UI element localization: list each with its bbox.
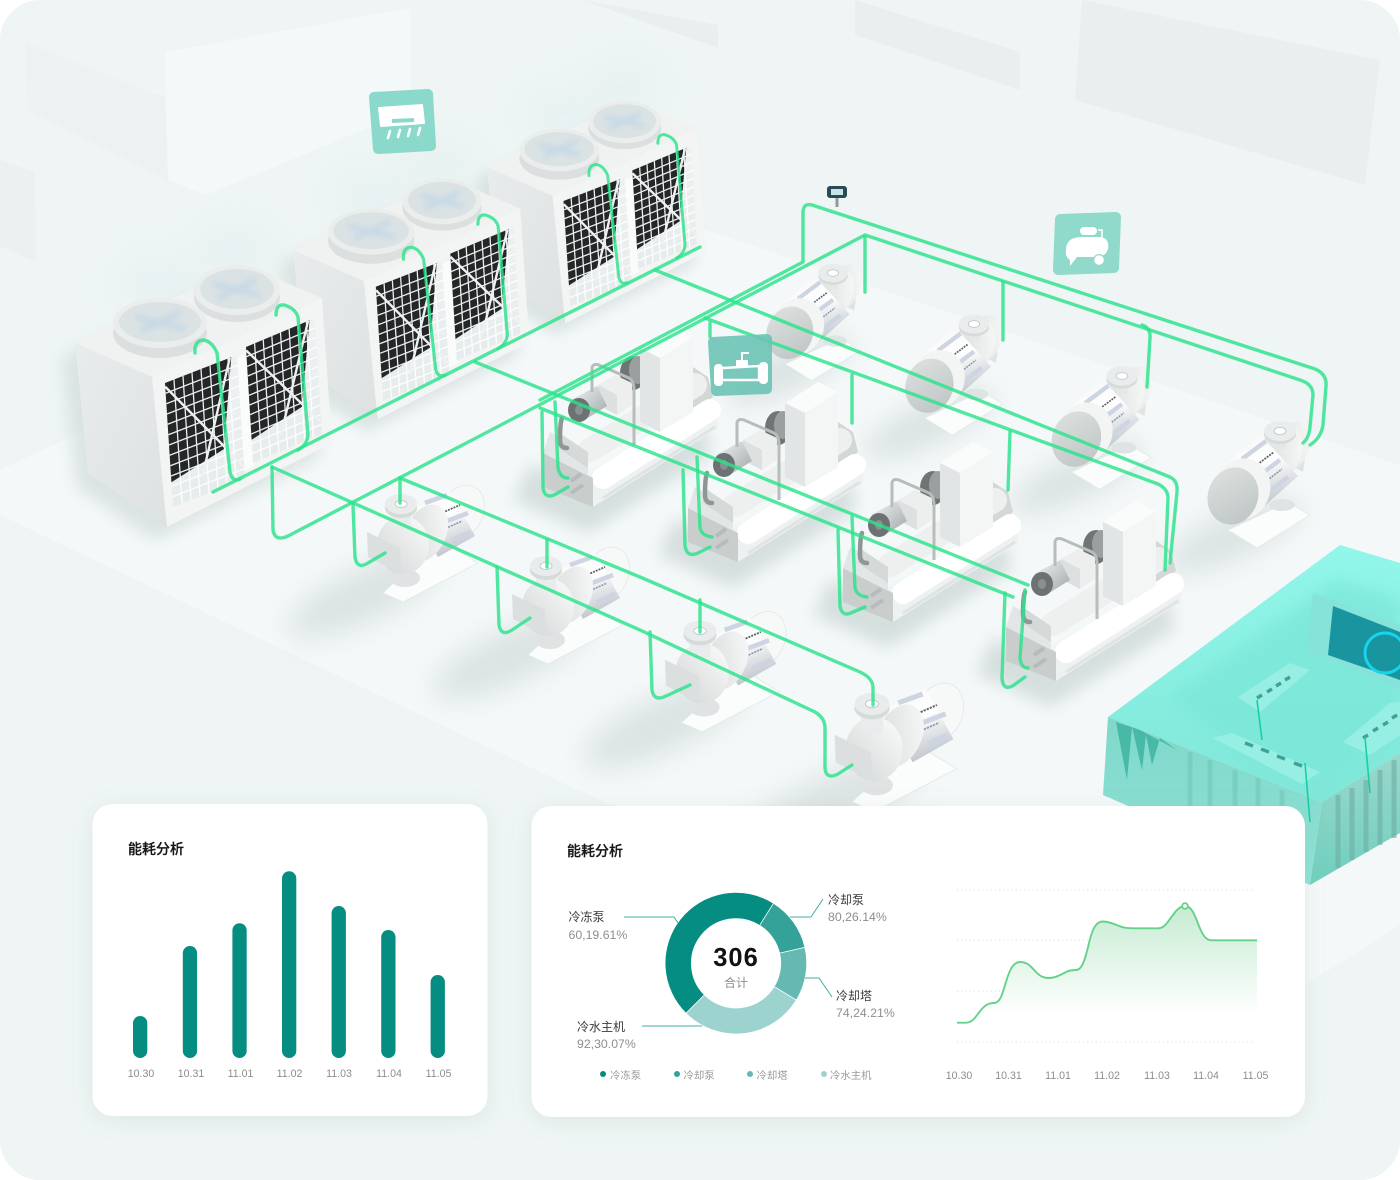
line chart axis labels: 11.04 xyxy=(1193,1070,1219,1082)
conference table 1 xyxy=(1238,663,1310,740)
lower pump row: pump 2 xyxy=(432,546,630,705)
panel: bar chart card xyxy=(92,804,488,1116)
donut leader lines xyxy=(624,899,832,1026)
donut total xyxy=(714,948,757,988)
refrigeration machine 1 xyxy=(513,327,718,533)
label: 冷却泵 xyxy=(828,893,887,924)
ghost buildings backdrop xyxy=(0,0,1380,262)
donut total: 合计 xyxy=(724,975,748,990)
line chart axis labels: 11.05 xyxy=(1243,1070,1268,1082)
label: 冷却塔 xyxy=(836,989,895,1020)
donut legend xyxy=(600,1069,872,1082)
refrigeration machine 3 xyxy=(813,442,1018,648)
wall screen xyxy=(1307,593,1400,690)
cooling tower 2 xyxy=(282,178,529,432)
upper pump row: pump 5 xyxy=(728,264,861,408)
line chart axis labels: 11.01 xyxy=(1045,1070,1071,1082)
label: 冷冻泵: 60,19.61% xyxy=(568,928,627,942)
donut card heading: 能耗分析 xyxy=(567,843,623,859)
donut total: 306 xyxy=(713,944,759,972)
donut legend: 冷却泵 xyxy=(684,1069,715,1082)
icon: valve tag xyxy=(713,339,768,391)
refrigeration machine 4 xyxy=(976,501,1181,707)
label: 冷却泵: 冷却泵 xyxy=(828,893,864,907)
bar chart axis labels: 11.05 xyxy=(426,1068,451,1080)
conference table 3 xyxy=(1343,702,1400,793)
bar chart axis labels: 10.30 xyxy=(128,1068,154,1080)
line chart axis labels: 10.31 xyxy=(995,1070,1022,1082)
room right wall xyxy=(1310,753,1400,885)
cooling tower steam xyxy=(115,57,665,315)
floor slab xyxy=(0,228,1400,985)
bar chart axis labels xyxy=(128,1070,451,1077)
green water pipes xyxy=(213,205,1326,776)
lower pump row: pump 1 xyxy=(288,484,485,643)
upper pump row: pump 6 xyxy=(865,314,1003,464)
upper pump row: pump 8 xyxy=(1169,421,1310,578)
icon: pressure sensor xyxy=(827,186,847,207)
line chart axis labels: 10.30 xyxy=(946,1070,972,1082)
meeting room block xyxy=(1103,545,1400,885)
bar chart axis labels: 11.03 xyxy=(326,1068,352,1080)
bar chart axis labels: 11.04 xyxy=(376,1068,402,1080)
bar chart axis labels: 11.02 xyxy=(277,1068,302,1080)
icon: air conditioner tag xyxy=(374,94,431,149)
lower pump row: pump 3 xyxy=(583,611,786,774)
label: 冷水主机 xyxy=(577,1020,636,1051)
line chart axis labels: 11.02 xyxy=(1094,1070,1120,1082)
bar chart axis labels: 10.31 xyxy=(178,1068,204,1080)
conference table 2 xyxy=(1213,733,1320,822)
donut legend: 冷却塔 xyxy=(756,1069,788,1082)
line chart axis labels: 11.03 xyxy=(1144,1070,1170,1082)
label: 冷水主机: 92,30.07% xyxy=(577,1037,636,1051)
donut legend: 冷水主机 xyxy=(830,1069,872,1082)
bar chart heading: 能耗分析 xyxy=(128,841,184,857)
line chart axis labels xyxy=(946,1070,1268,1082)
line chart xyxy=(957,890,1257,1042)
donut chart xyxy=(665,892,807,1034)
refrigeration machine 2 xyxy=(658,382,863,588)
cooling tower 3 xyxy=(477,101,705,335)
donut legend: 冷冻泵 xyxy=(610,1069,641,1082)
label: 冷水主机: 冷水主机 xyxy=(577,1020,625,1034)
icon: compressor tag xyxy=(1058,217,1116,270)
label: 冷却泵: 80,26.14% xyxy=(828,910,887,924)
cooling tower 1 xyxy=(63,265,332,541)
label: 冷冻泵: 冷冻泵 xyxy=(568,909,605,924)
bars xyxy=(133,871,445,1058)
lower pump row: pump 4 xyxy=(764,682,964,806)
upper pump row: pump 7 xyxy=(1011,366,1152,519)
label: 冷却塔: 74,24.21% xyxy=(836,1006,895,1020)
label: 冷却塔: 冷却塔 xyxy=(836,989,872,1003)
panel: donut and line chart card xyxy=(532,806,1305,1117)
label: 冷冻泵 xyxy=(568,909,627,942)
room front wall xyxy=(1103,717,1322,885)
bar chart axis labels: 11.01 xyxy=(228,1068,253,1080)
